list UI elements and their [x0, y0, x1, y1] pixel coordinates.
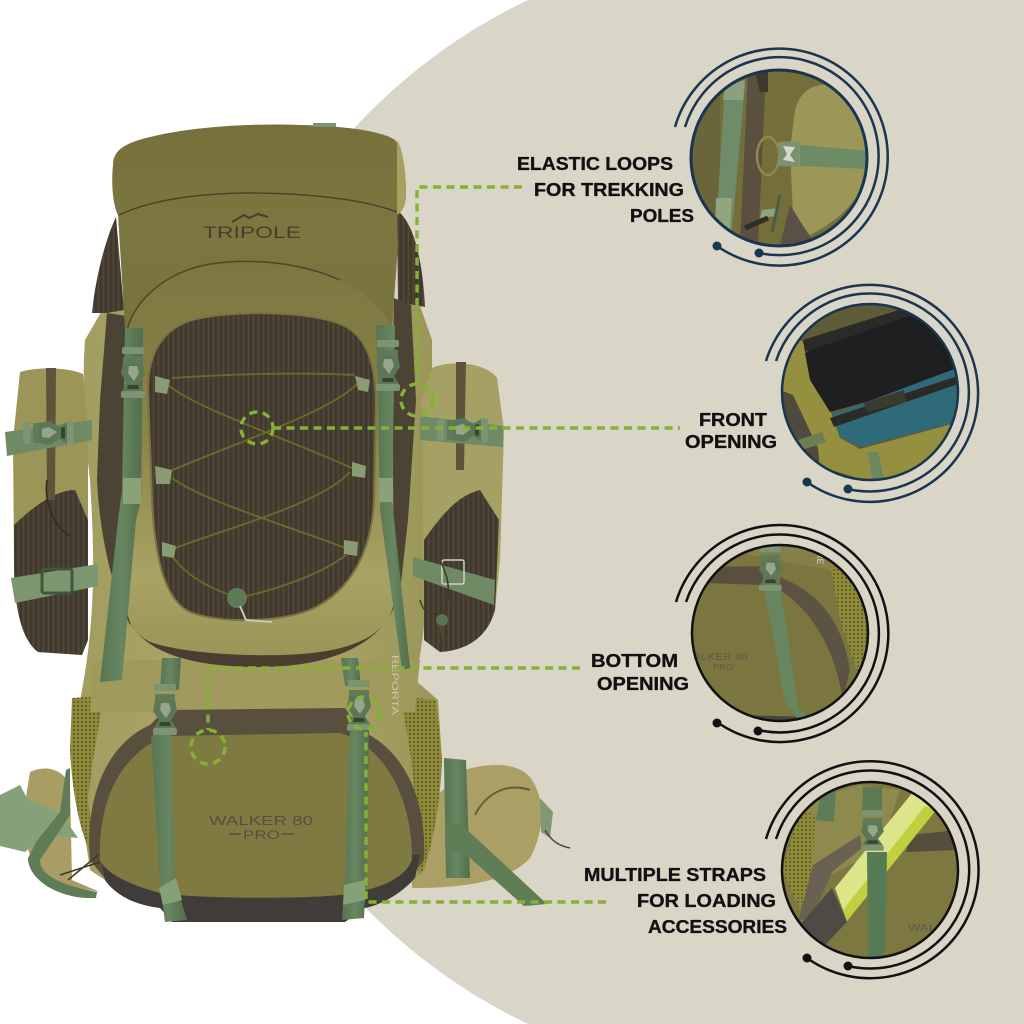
rings	[676, 525, 888, 742]
brown mesh panel	[148, 313, 376, 620]
bungee cords	[168, 374, 357, 598]
rings	[766, 285, 978, 502]
ring dots	[802, 478, 852, 494]
left side pocket	[5, 368, 98, 655]
backpack illustration	[0, 123, 570, 922]
bottom pocket	[60, 708, 424, 922]
side mesh pockets	[70, 696, 442, 876]
right upper strap	[376, 325, 410, 670]
label: bottom opening: BOTTOM	[591, 650, 678, 671]
detail circle: bottom opening: RE	[815, 552, 825, 565]
left upper strap	[100, 328, 145, 682]
label: bottom opening	[591, 650, 689, 694]
left hip belt	[0, 768, 100, 898]
logo: Tripole: TRIPOLE	[203, 223, 301, 242]
detail circle: bottom opening: PRO	[713, 663, 733, 672]
detail circle: bottom opening	[676, 525, 888, 742]
dark trim under front pocket	[122, 590, 398, 667]
lower left strap	[151, 658, 187, 922]
detail circle: elastic loops	[675, 49, 888, 266]
top lid	[112, 123, 406, 330]
callout line: bottom opening	[191, 668, 580, 764]
logo: Tripole	[203, 214, 301, 242]
label: front opening: OPENING	[685, 431, 777, 452]
ring dots	[712, 242, 764, 258]
detail circle: multiple straps	[766, 761, 979, 978]
label: front opening: FRONT	[699, 409, 768, 430]
front pocket seam	[127, 261, 340, 330]
label: elastic loops: FOR TREKKING	[534, 179, 684, 200]
detail circle: bottom opening: ALKER 80	[693, 652, 749, 663]
label: bottom opening: OPENING	[597, 673, 689, 694]
label: multiple straps: MULTIPLE STRAPS	[584, 864, 766, 885]
label: multiple straps: FOR LOADING	[637, 890, 776, 911]
ring dots	[712, 718, 762, 736]
model label: WALKER 80	[209, 813, 313, 828]
cord tabs	[155, 376, 370, 608]
right hip belt	[410, 758, 570, 906]
label: elastic loops	[517, 153, 694, 226]
label: elastic loops: ELASTIC LOOPS	[517, 153, 673, 174]
model label	[209, 813, 313, 842]
label: elastic loops: POLES	[630, 205, 694, 226]
dark side panels	[92, 210, 425, 625]
lower right strap	[341, 658, 371, 920]
label: multiple straps	[584, 864, 787, 937]
rotated faint model text: REPORTA	[390, 655, 400, 715]
detail circle: multiple straps: WAL	[908, 923, 937, 934]
front pocket	[125, 261, 394, 655]
rings	[766, 761, 979, 978]
ring dots	[802, 954, 852, 970]
main body	[72, 300, 442, 890]
lower body panel	[90, 660, 420, 712]
toggle hardware	[240, 606, 272, 622]
callout line: elastic loops	[401, 187, 522, 416]
label: multiple straps: ACCESSORIES	[648, 916, 787, 937]
callout line: multiple straps	[348, 697, 606, 902]
label: front opening	[685, 409, 777, 452]
rings	[675, 49, 888, 266]
callout line: front opening	[241, 412, 680, 444]
detail circle: front opening	[766, 285, 978, 502]
right side pocket	[413, 362, 504, 652]
model label: PRO	[243, 828, 280, 842]
